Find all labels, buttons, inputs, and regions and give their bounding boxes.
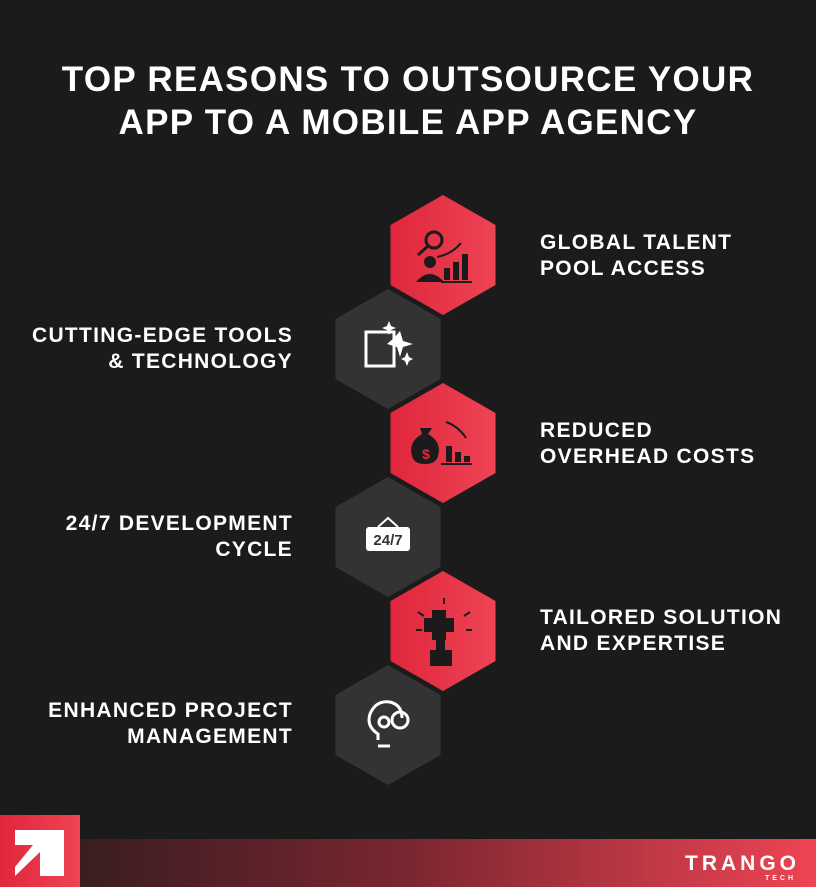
logo square [0,815,80,887]
brand text: TECH [765,875,796,882]
hex 1: global talent [390,195,496,315]
title: TOP REASONS TO OUTSOURCE YOUR [62,60,754,99]
footer bar [0,839,816,887]
label: tools [32,324,293,373]
label: global talent [540,231,732,280]
hex 6: project management [336,665,440,785]
label: tools: & TECHNOLOGY [108,350,293,373]
hex 3: reduced costs: $ [422,446,430,462]
label: tailored [540,606,782,655]
label: overhead [540,419,755,468]
hex 2: tools [336,289,440,409]
label: project management: MANAGEMENT [127,725,293,748]
label: tools: CUTTING-EDGE TOOLS [32,324,293,347]
label: project management: ENHANCED PROJECT [48,699,293,722]
hex 3: reduced costs [390,383,496,503]
label: project management [48,699,293,748]
label: tailored: TAILORED SOLUTION [540,606,782,629]
label: global talent: POOL ACCESS [540,257,706,280]
label: 24/7: CYCLE [215,538,293,561]
title [62,60,754,142]
label: tailored: AND EXPERTISE [540,632,726,655]
hex 5: tailored [390,571,496,691]
label: global talent: GLOBAL TALENT [540,231,732,254]
hex 4: 24/7: 24/7 [373,532,403,549]
hex 4: 24/7 [336,477,440,597]
label: overhead: REDUCED [540,419,653,442]
title: APP TO A MOBILE APP AGENCY [118,103,697,142]
label: 24/7 [66,512,293,561]
label: 24/7: 24/7 DEVELOPMENT [66,512,293,535]
label: overhead: OVERHEAD COSTS [540,445,755,468]
brand text: TRANGO [685,852,796,875]
